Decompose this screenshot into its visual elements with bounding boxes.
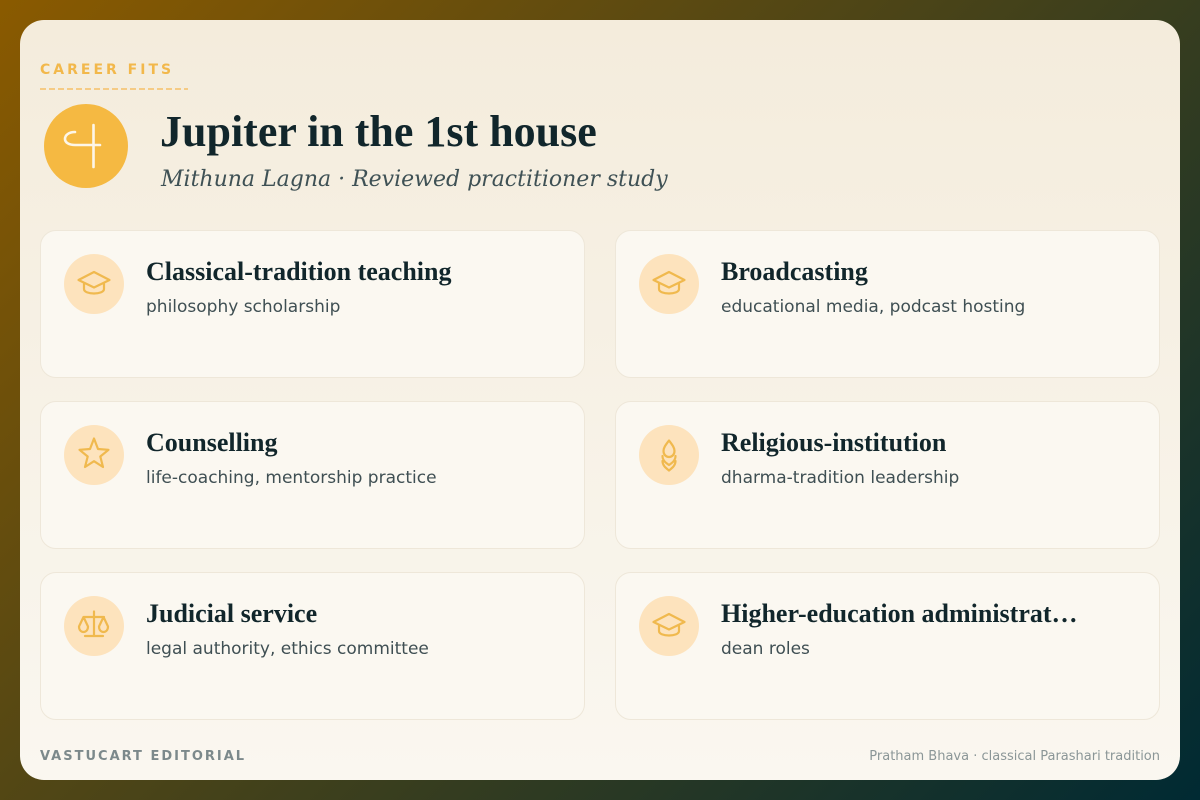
- footer: source note: Pratham Bhava · classical Parashari tradition: [869, 749, 1160, 764]
- card description: legal authority, ethics committee: [146, 639, 429, 659]
- icon: graduation cap: [639, 254, 699, 314]
- subtitle: Mithuna Lagna · Reviewed practitioner study: [161, 167, 668, 192]
- dashed rule under the eyebrow: [40, 88, 188, 90]
- panel: Higher-education administrat…: [615, 572, 1160, 720]
- card description: philosophy scholarship: [146, 297, 340, 317]
- card heading: Religious-institution: [721, 428, 946, 457]
- card description: educational media, podcast hosting: [721, 297, 1025, 317]
- card description: life-coaching, mentorship practice: [146, 468, 437, 488]
- icon: Jupiter glyph badge: [44, 104, 128, 188]
- card description: dean roles: [721, 639, 810, 659]
- panel: Judicial service: [40, 572, 585, 720]
- panel: Religious-institution: [615, 401, 1160, 549]
- icon: flame on lotus: [639, 425, 699, 485]
- panel: Counselling: [40, 401, 585, 549]
- card heading: Classical-tradition teaching: [146, 257, 452, 286]
- card description: dharma-tradition leadership: [721, 468, 959, 488]
- card heading: Counselling: [146, 428, 278, 457]
- icon: graduation cap: [639, 596, 699, 656]
- card heading: Broadcasting: [721, 257, 868, 286]
- icon: graduation cap: [64, 254, 124, 314]
- panel: Broadcasting: [615, 230, 1160, 378]
- icon: scales: [64, 596, 124, 656]
- icon: star: [64, 425, 124, 485]
- title: Jupiter in the 1st house: [160, 107, 597, 156]
- card heading: Higher-education administrat…: [721, 599, 1078, 628]
- card heading: Judicial service: [146, 599, 317, 628]
- eyebrow label: CAREER FITS: [40, 62, 174, 78]
- footer: brand: VASTUCART EDITORIAL: [40, 749, 246, 764]
- panel: Classical-tradition teaching: [40, 230, 585, 378]
